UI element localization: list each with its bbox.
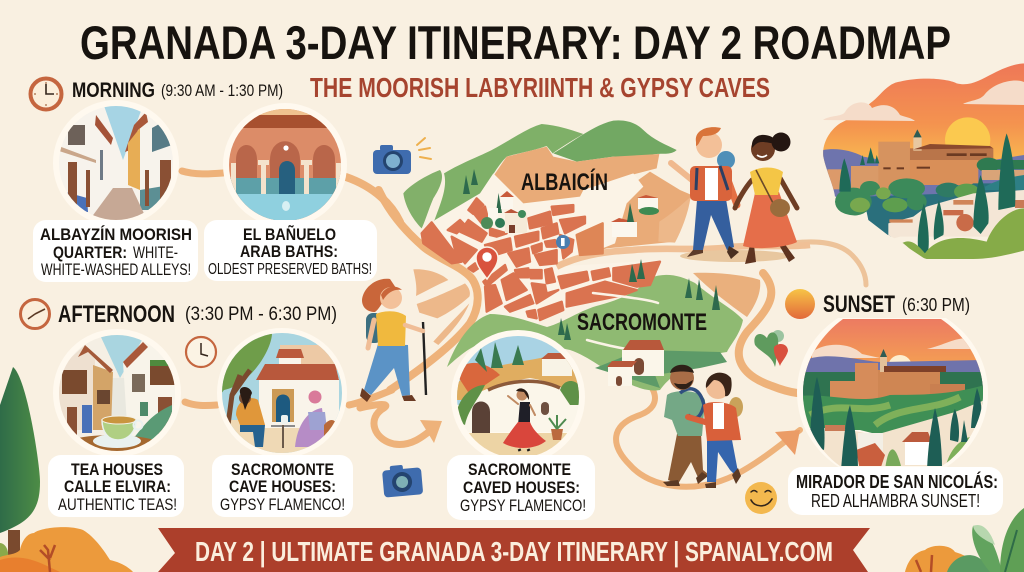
cafe illustration	[220, 333, 345, 460]
sacromonte hill	[447, 275, 743, 390]
main road west	[379, 190, 478, 390]
camera icon top	[373, 138, 431, 174]
caption: cave houses	[212, 455, 353, 517]
mountains	[820, 149, 1024, 197]
couple walking at bottom	[663, 365, 743, 488]
morning hours: (9:30 AM - 1:30 PM)	[161, 81, 283, 100]
left hill lobe	[403, 170, 442, 228]
stop: El Banuelo	[223, 103, 347, 227]
route paths	[182, 171, 866, 487]
caption: tea houses: TEA HOUSES	[71, 460, 163, 479]
hiker	[360, 279, 426, 402]
stop: Albayzin	[53, 100, 180, 226]
leaf big	[1000, 508, 1024, 572]
hill trails	[587, 293, 658, 350]
caption: tea houses: AUTHENTIC TEAS!	[58, 495, 177, 514]
caption: cave houses: GYPSY FLAMENCO!	[220, 495, 345, 514]
label: Albaicin: ALBAICÍN	[521, 168, 608, 196]
cypresses	[463, 169, 720, 340]
sun	[945, 117, 990, 146]
upper hill	[434, 124, 583, 222]
footer decoration: right foliage	[905, 508, 1024, 572]
caption: Sacromonte flamenco	[447, 455, 595, 520]
caption: tea houses: CALLE ELVIRA:	[64, 477, 171, 496]
sacromonte house	[595, 340, 727, 388]
smile icon	[745, 482, 777, 514]
caption: Albayzin: WHITE-WASHED ALLEYS!	[41, 260, 191, 279]
woman	[735, 132, 797, 264]
couple walking at top right	[671, 127, 797, 264]
east houses	[611, 195, 659, 237]
man	[663, 365, 708, 486]
albaicin houses	[481, 191, 527, 233]
baths illustration	[229, 109, 341, 220]
ground shadow	[680, 250, 790, 262]
caption: cave houses: CAVE HOUSES:	[229, 477, 336, 496]
footer decoration: cypress tree	[0, 367, 40, 557]
caption: El Banuelo: EL BAÑUELO	[243, 224, 336, 244]
Alhambra scene top right	[820, 60, 1024, 260]
sunset hours: (6:30 PM)	[902, 295, 970, 315]
arrow: to sunset viewpoint	[775, 430, 800, 455]
leaf pale	[972, 525, 1002, 572]
tan patch east	[658, 197, 691, 243]
caption: Sacromonte flamenco: GYPSY FLAMENCO!	[460, 496, 586, 515]
orange shrub	[905, 546, 980, 572]
flamenco illustration	[457, 336, 579, 455]
red twigs	[916, 555, 932, 572]
blue marker	[556, 235, 570, 249]
sunset label: SUNSET	[823, 291, 895, 318]
icon: small clock	[186, 337, 216, 367]
caption: cave houses: SACROMONTE	[231, 460, 334, 479]
footer decoration: orange bush	[0, 527, 133, 572]
map pin	[476, 247, 498, 279]
morning time label: MORNING	[72, 79, 155, 102]
stop: Sacromonte flamenco	[451, 330, 585, 464]
street blocks	[422, 198, 660, 320]
footer banner	[158, 528, 870, 572]
stop: tea houses	[53, 329, 181, 455]
man	[671, 127, 739, 259]
forest	[835, 158, 1024, 237]
caption: Albayzin: QUARTER:	[53, 243, 127, 262]
far village	[827, 169, 842, 190]
tan patch west 1	[413, 269, 448, 296]
caption: Albayzin: WHITE-	[133, 243, 178, 262]
icon: sun	[785, 289, 815, 319]
caption: tea houses	[48, 455, 184, 517]
label: Sacromonte: SACROMONTE	[577, 309, 707, 336]
green hill	[902, 208, 1024, 260]
green fronds	[947, 555, 992, 572]
subtitle: THE MOORISH LABYRIINTH & GYPSY CAVES	[310, 72, 770, 103]
white village	[888, 190, 1024, 240]
caption: Sacromonte flamenco: SACROMONTE	[468, 460, 571, 479]
tan strip south-west	[433, 303, 469, 345]
right hill	[553, 120, 677, 162]
tan terrain	[480, 147, 692, 265]
caption: El Banuelo	[204, 220, 377, 281]
morning heading	[30, 78, 155, 110]
clouds	[823, 80, 1024, 121]
main road east	[557, 245, 810, 267]
cream street blocks base	[420, 173, 662, 323]
tan patch sacromonte	[693, 273, 760, 317]
caption: Sacromonte flamenco: CAVED HOUSES:	[463, 478, 580, 497]
caption: El Banuelo: ARAB BATHS:	[240, 242, 338, 261]
green hills and tan terrain	[379, 120, 810, 390]
map	[379, 120, 810, 390]
icon: morning clock	[30, 78, 62, 110]
afternoon label: AFTERNOON	[58, 301, 175, 328]
afternoon hours: (3:30 PM - 6:30 PM)	[185, 304, 337, 325]
arrow: loop arrowhead	[420, 420, 442, 443]
caption: El Banuelo: OLDEST PRESERVED BATHS!	[208, 261, 372, 278]
tan patch west 2	[417, 283, 470, 318]
footer decoration: small shrub	[0, 543, 8, 557]
fortress	[851, 129, 993, 191]
balloons icon	[754, 330, 788, 367]
stop: cave houses	[217, 328, 347, 460]
tea illustration	[59, 335, 174, 451]
stop: Mirador de San Nicolas	[797, 318, 988, 470]
caption: Albayzin	[33, 220, 198, 282]
woman	[688, 373, 743, 488]
afternoon heading	[20, 300, 175, 328]
street illustration	[60, 106, 171, 220]
sunset illustration	[800, 318, 985, 470]
sky	[820, 60, 1024, 167]
cypress	[839, 133, 1015, 255]
caption: Mirador de San Nicolas	[788, 467, 1003, 515]
sunset heading	[785, 289, 895, 319]
camera icon bottom	[382, 463, 423, 498]
caption: Albayzin: ALBAYZÍN MOORISH	[40, 225, 192, 244]
icon: afternoon clock	[20, 300, 50, 328]
